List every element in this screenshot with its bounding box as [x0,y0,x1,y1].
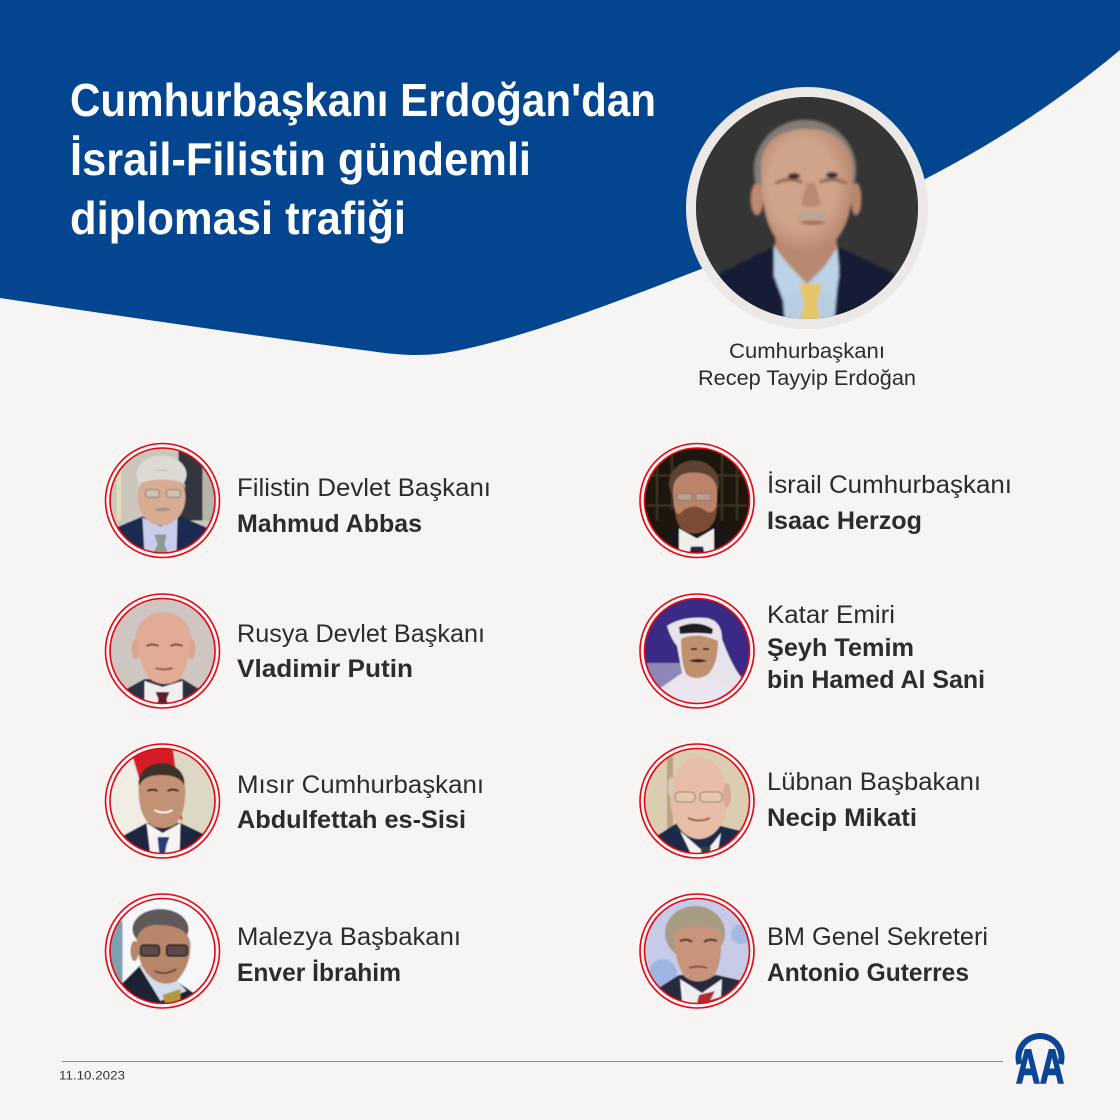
logo: Anadolu Agency: AA [1016,1041,1064,1094]
date: 11.10.2023 [59,1068,125,1082]
text: Abdulfettah es-Sisi [237,771,484,834]
text: Antonio Guterres [767,923,988,987]
portrait: Recep Tayyip Erdoğan [691,92,923,324]
portrait: Abdulfettah es-Sisi [106,744,220,858]
portrait: Şeyh Temim bin Hamed Al Sani [640,594,754,708]
portrait: Vladimir Putin [106,594,220,708]
text: Mahmud Abbas: Mahmud Abbas [237,510,422,538]
text: Enver İbrahim: Malezya Başbakanı [237,923,461,951]
text: Isaac Herzog: Isaac Herzog [767,507,922,535]
logo: Anadolu Agency [1016,1036,1064,1094]
text: Şeyh Temim bin Hamed Al Sani: Şeyh Temim [767,634,914,662]
portrait: Isaac Herzog [640,444,754,558]
caption: Recep Tayyip Erdoğan: Cumhurbaşkanı [729,339,885,363]
text: Şeyh Temim bin Hamed Al Sani: Katar Emiri [767,601,895,629]
text: Antonio Guterres: Antonio Guterres [767,959,969,987]
portrait: Enver İbrahim [106,894,220,1008]
text: Mahmud Abbas [237,474,491,538]
portrait: Antonio Guterres [640,894,754,1008]
portrait: Necip Mikati [640,744,754,858]
text: Şeyh Temim bin Hamed Al Sani [767,601,985,694]
title: Cumhurbaşkanı Erdoğan'dan [70,74,656,126]
blue header shape [0,0,1120,355]
text: Vladimir Putin: Vladimir Putin [237,655,413,683]
text: Isaac Herzog [767,470,1012,535]
text: Necip Mikati: Lübnan Başbakanı [767,768,981,796]
portrait: Mahmud Abbas [106,444,220,558]
text: Mahmud Abbas: Filistin Devlet Başkanı [237,474,491,502]
title: diplomasi trafiği [70,192,406,244]
text: Isaac Herzog: İsrail Cumhurbaşkanı [767,470,1012,499]
caption: Recep Tayyip Erdoğan: Recep Tayyip Erdoğan [698,366,916,390]
text: Şeyh Temim bin Hamed Al Sani: bin Hamed Al Sani [767,666,985,694]
text: Vladimir Putin: Rusya Devlet Başkanı [237,620,485,648]
text: Vladimir Putin [237,620,485,683]
text: Antonio Guterres: BM Genel Sekreteri [767,923,988,951]
caption: Recep Tayyip Erdoğan [698,339,916,390]
title [70,74,656,244]
title: İsrail-Filistin gündemli [70,133,531,185]
text: Necip Mikati [767,768,981,832]
text: Enver İbrahim: Enver İbrahim [237,959,401,987]
text: Abdulfettah es-Sisi: Mısır Cumhurbaşkanı [237,771,484,799]
text: Enver İbrahim [237,923,461,987]
text: Necip Mikati: Necip Mikati [767,804,917,832]
text: Abdulfettah es-Sisi: Abdulfettah es-Sisi [237,806,466,834]
